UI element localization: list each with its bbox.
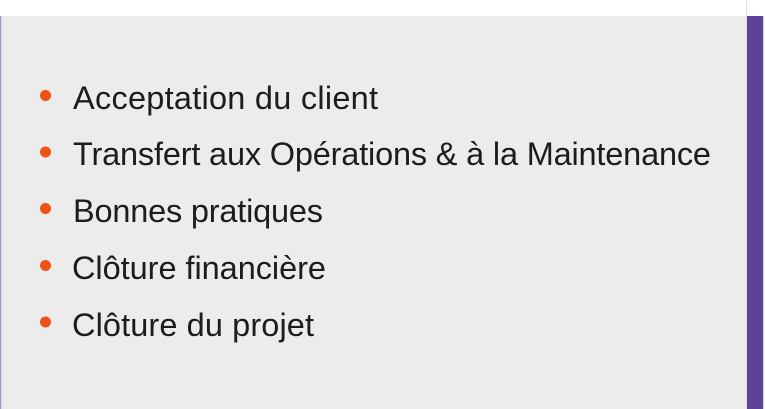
item: Clôture du projet: Clôture du projet bbox=[72, 307, 314, 343]
item: Bonnes pratiques: Bonnes pratiques bbox=[73, 193, 323, 229]
item: Acceptation du client: Acceptation du client bbox=[73, 80, 378, 116]
left accent line bbox=[0, 16, 1, 409]
right purple bar bbox=[747, 16, 763, 409]
right bar outer edge bbox=[763, 16, 764, 409]
item: Clôture financière: Clôture financière bbox=[72, 250, 326, 286]
item: Transfert aux Opérations & à la Maintenance: Transfert aux Opérations & à la Maintenance bbox=[73, 136, 711, 172]
right bar top guide line bbox=[746, 0, 747, 409]
checklist bbox=[40, 80, 711, 343]
